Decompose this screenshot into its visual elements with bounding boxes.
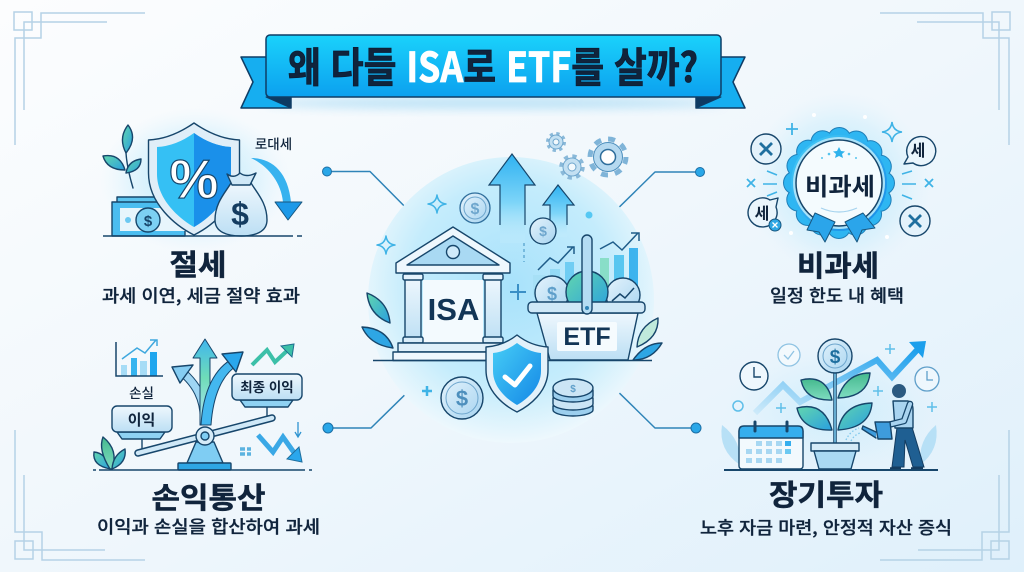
right ribbon tail: [696, 57, 745, 108]
center illustration: ISA and ETF: [362, 134, 662, 443]
plus marks: [733, 344, 937, 413]
icon: x circle: [900, 206, 930, 236]
corner frame: top left: [14, 12, 145, 145]
ISA label: ISA: [428, 292, 479, 327]
box: final profit: [232, 374, 302, 407]
icon: money bag: [215, 173, 267, 236]
heading: 장기투자: [769, 472, 883, 514]
bank: ISA: [393, 227, 510, 360]
description: 이익과 손실을 합산하여 과세: [97, 514, 320, 539]
label: loss: 손실: [129, 382, 154, 402]
banner body: [266, 35, 721, 97]
box: profit: 이익: [128, 409, 155, 430]
icon: plant: [103, 125, 141, 188]
icon: balance scale: [138, 407, 272, 470]
description: 일정 한도 내 혜택: [770, 283, 904, 308]
icon: rosette badge: [791, 135, 887, 242]
connector: bottom left: [323, 377, 423, 433]
basket coins: [535, 276, 569, 310]
handle: [582, 235, 592, 314]
connector: bottom right: [602, 376, 701, 433]
sparkles: [377, 195, 526, 396]
icon: person watering: [846, 384, 924, 469]
heading: 비과세: [797, 243, 879, 285]
heading: 절세: [170, 242, 226, 284]
rays and marks: [747, 122, 933, 199]
panel: tax saving: [100, 108, 302, 308]
ground line: [103, 235, 302, 237]
icon: small blocks: [240, 449, 251, 454]
icon: plant with coin: $: [830, 347, 841, 368]
leaves left: [362, 293, 393, 348]
icon: tax bubble with x: [748, 198, 781, 231]
panel: tax free: [747, 91, 936, 308]
icon: money bag: $: [231, 196, 249, 232]
ribbon folds: [266, 97, 721, 108]
icon: plant with coin: [797, 339, 872, 469]
roof: [396, 227, 510, 273]
label: tax down: 로대세: [255, 133, 292, 153]
shield with check: [486, 335, 548, 412]
icon: banknote: [112, 197, 185, 236]
box: profit: [112, 406, 172, 439]
panel: loss offset: [93, 339, 320, 539]
base steps: [398, 343, 508, 352]
box: final profit: 최종 이익: [240, 376, 294, 396]
corner frame: bottom left: [15, 430, 145, 560]
description: 노후 자금 마련, 안정적 자산 증식: [700, 515, 952, 540]
panel: long-term investing: [700, 339, 952, 540]
badge label: 비과세: [805, 167, 875, 202]
coin stack: $: [570, 384, 576, 395]
connector: top left: [322, 167, 423, 225]
description: 과세 이연, 세금 절약 효과: [102, 283, 300, 308]
arrow: curved down: [251, 158, 302, 220]
leaves right: [633, 318, 662, 360]
icon: tax bubble with x: 세: [755, 200, 769, 224]
icon: tax bubble: 세: [911, 137, 925, 161]
bars: [533, 248, 638, 295]
coin: $: [539, 223, 547, 239]
coin: $: [456, 386, 468, 411]
title text: 왜 다들 ISA로 ETF를 살까?: [288, 34, 698, 94]
small up arrow: [543, 185, 574, 237]
ground line: [93, 469, 312, 471]
foliage: [721, 425, 937, 465]
icon: tax bubble: [904, 137, 936, 166]
big up arrow: [489, 154, 535, 243]
corner frame: top right: [880, 12, 1010, 145]
icon: faded clock: [778, 344, 800, 366]
title banner: [241, 34, 745, 109]
icon: percent shield: [148, 123, 240, 235]
icon: banknote: $: [144, 213, 153, 230]
icon: percent shield: %: [170, 148, 218, 210]
basket: ETF: [528, 233, 645, 360]
coin: [441, 377, 483, 419]
coin: [460, 193, 490, 223]
heading: 손익통산: [152, 475, 266, 517]
icon: right clock: [915, 367, 939, 391]
icon: bar chart: [116, 340, 163, 376]
icon: zigzag down: [258, 435, 295, 454]
coin stack: [553, 379, 593, 416]
glowing disc: [368, 157, 654, 443]
icon: calendar: [739, 422, 803, 469]
ground line: [724, 469, 938, 471]
ground line: [373, 360, 652, 362]
coin: [530, 218, 556, 244]
icon: zigzag up: [252, 348, 290, 365]
icon: small down arrow: [295, 422, 301, 437]
left ribbon tail: [241, 57, 291, 108]
basket: ETF: $: [547, 284, 557, 304]
pillars: [405, 277, 421, 343]
trend line with arrow: [755, 341, 926, 413]
arrows: three branches: [172, 339, 243, 425]
connector: top right: [602, 168, 704, 224]
icon: x circle: [751, 134, 781, 164]
icon: plant: [94, 437, 125, 469]
body: [537, 313, 638, 360]
corner frame: bottom right: [880, 430, 1009, 560]
coin: $: [471, 201, 480, 218]
icon: clock: [740, 362, 768, 390]
gears: [548, 134, 626, 178]
ETF label: ETF: [563, 323, 611, 351]
